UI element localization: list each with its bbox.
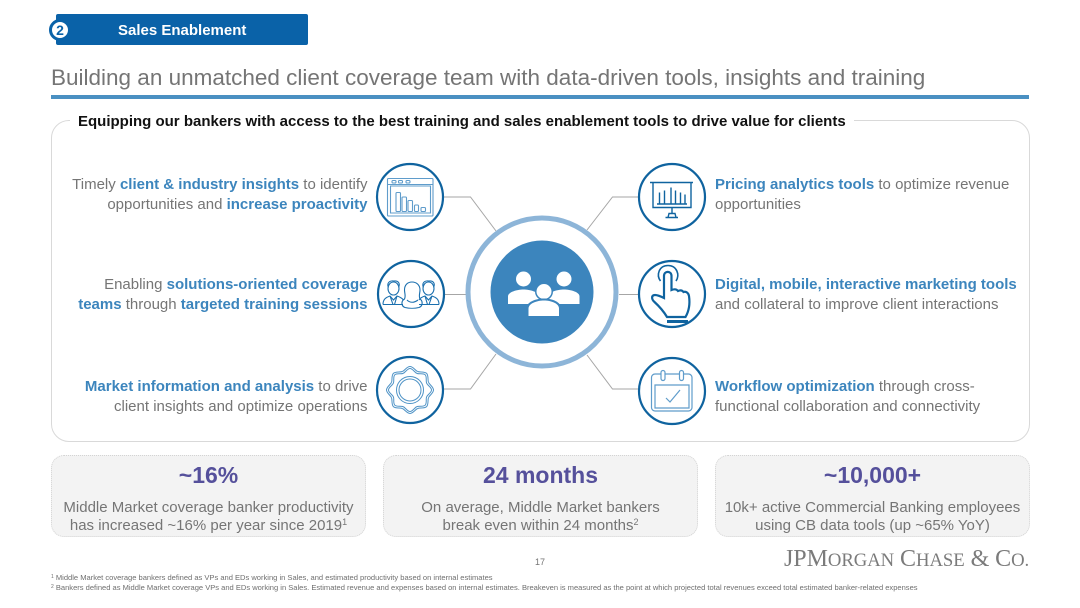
- stat card: break even: break even within 24 months2: [443, 517, 638, 534]
- text: pricing analytics: opportunities: [715, 196, 801, 213]
- text: workflow optimization: functional collaboration and connectivity: [715, 398, 980, 415]
- text: market information: Market information and analysis to drive: [85, 378, 368, 395]
- footnotes: 2 Bankers defined as Middle Market coverage VPs and EDs working in Sales. Estimated revenue and expenses based on internal estimates. Breakeven is measured as the point at which projected total revenues exceed total estimated banker-related expenses: [51, 582, 918, 592]
- stat card: break even: On average, Middle Market bankers: [421, 499, 660, 516]
- stat card: productivity: ~16%: [179, 462, 238, 488]
- stat card: productivity: Middle Market coverage banker productivity: [63, 499, 354, 516]
- logo wordmark: JPMORGAN CHASE & CO.: [784, 546, 1029, 572]
- page number: 17: [535, 557, 545, 567]
- stat card: break even: 24 months: [483, 462, 598, 488]
- section tab: 2: [56, 22, 64, 38]
- text: training sessions: teams through targeted training sessions: [78, 296, 368, 313]
- stat card: employees: [715, 455, 1030, 537]
- text: workflow optimization: Workflow optimization through cross-: [715, 378, 975, 395]
- icon: bankers team: [378, 261, 444, 327]
- icon: calendar check: [639, 358, 705, 424]
- icon: dashboard window: [377, 164, 443, 230]
- text: marketing tools: Digital, mobile, interactive marketing tools: [715, 276, 1017, 293]
- central hub: [468, 218, 616, 366]
- text: market information: client insights and optimize operations: [114, 398, 368, 415]
- stat card: employees: 10k+ active Commercial Banking employees: [725, 499, 1020, 516]
- text: training sessions: Enabling solutions-oriented coverage: [104, 276, 368, 293]
- panel heading: Equipping our bankers with access to the best training and sales enablement tools to drive value for clients: [78, 113, 846, 130]
- text: marketing tools: and collateral to improve client interactions: [715, 296, 998, 313]
- section tab: [49, 14, 308, 45]
- text: pricing analytics: [715, 176, 1009, 213]
- text: marketing tools: [715, 276, 1017, 313]
- text: pricing analytics: Pricing analytics tools to optimize revenue: [715, 176, 1009, 193]
- stat card: employees: ~10,000+: [824, 462, 921, 488]
- title: Building an unmatched client coverage team with data-driven tools, insights and training: [51, 64, 925, 90]
- icon: pointing hand: [639, 261, 705, 327]
- footnotes: 1 Middle Market coverage bankers defined as VPs and EDs working in Sales, and estimated productivity based on internal estimates: [51, 572, 493, 582]
- stat card: productivity: [51, 455, 366, 537]
- stat card: productivity: has increased ~16% per year since 20191: [70, 517, 347, 534]
- text: client and industry insights: Timely client & industry insights to identify: [72, 176, 368, 193]
- main panel: [51, 120, 1030, 442]
- stat card: employees: using CB data tools (up ~65% YoY): [755, 517, 990, 534]
- stat card: break even: [383, 455, 698, 537]
- text: client and industry insights: [72, 176, 368, 213]
- text: client and industry insights: opportunities and increase proactivity: [107, 196, 368, 213]
- text: workflow optimization: [715, 378, 980, 415]
- footnotes: [51, 572, 918, 592]
- connector lines: [444, 197, 639, 389]
- icon: gear: [377, 357, 443, 423]
- section tab: Sales Enablement: [118, 22, 246, 38]
- text: market information: [85, 378, 368, 415]
- title rule: [51, 95, 1029, 99]
- icon: presentation board: [639, 164, 705, 230]
- text: training sessions: [78, 276, 368, 313]
